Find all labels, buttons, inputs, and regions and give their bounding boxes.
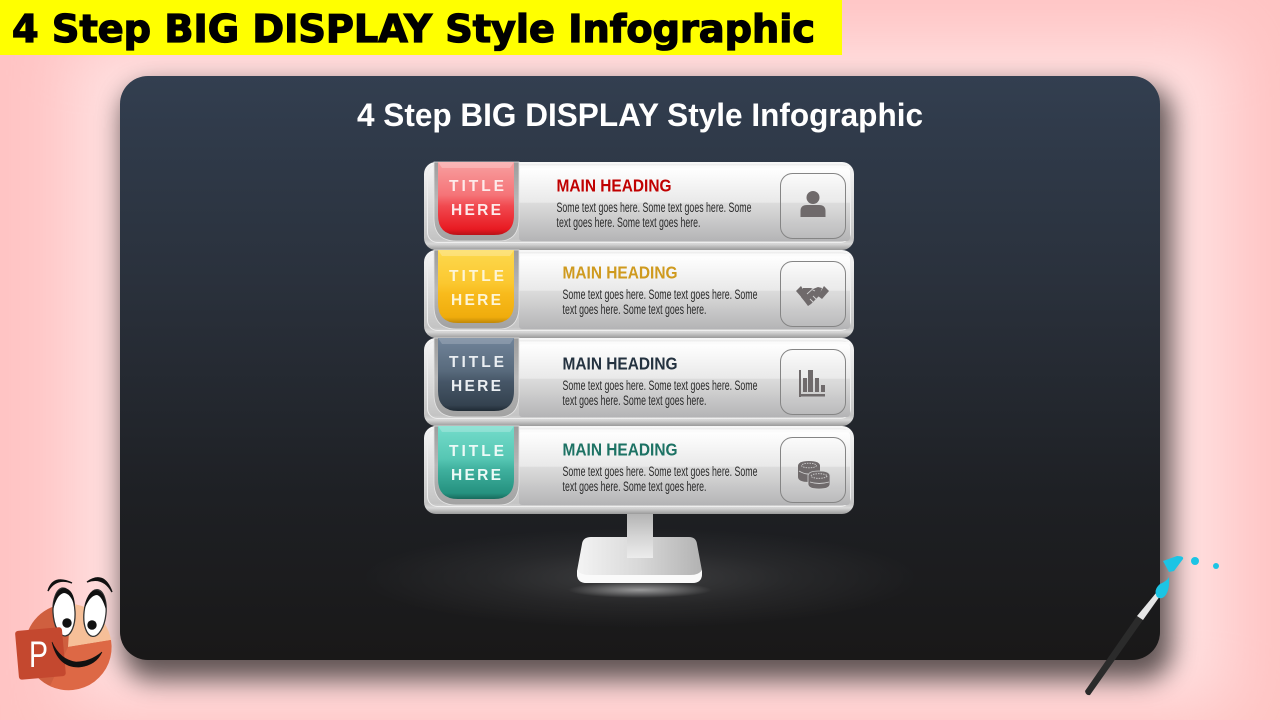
icon button: person — [780, 174, 846, 238]
stand neck — [627, 514, 653, 558]
tab 2 — [434, 250, 519, 329]
P tile: P — [29, 634, 48, 675]
paint drop large — [1191, 557, 1199, 565]
heading 3: MAIN HEADING — [562, 354, 678, 374]
icon button: bar chart — [780, 350, 846, 414]
eyebrows — [48, 578, 112, 592]
body text 1 — [556, 200, 752, 230]
paint splash — [1163, 556, 1183, 572]
body text 2: text goes here. Some text goes here. — [562, 302, 706, 317]
body text 4: text goes here. Some text goes here. — [562, 479, 706, 494]
tab 3 — [434, 338, 519, 417]
step 2 row — [424, 250, 854, 338]
heading 1: MAIN HEADING — [556, 176, 672, 196]
tab 1: TITLE — [449, 178, 504, 195]
top banner: 4 Step BIG DISPLAY Style Infographic — [12, 7, 815, 51]
tab 2: HERE — [451, 292, 501, 309]
stand base — [577, 537, 702, 583]
monitor stand — [568, 514, 712, 598]
PowerPoint mascot — [15, 578, 112, 690]
tab 4: HERE — [451, 467, 501, 484]
body text 4 — [562, 464, 758, 494]
tab 1 — [434, 162, 519, 241]
tab 3: TITLE — [449, 354, 504, 371]
tab 2: TITLE — [449, 268, 504, 285]
step 1 row — [424, 162, 854, 250]
brush ferrule — [1137, 593, 1160, 620]
panel shadow — [122, 86, 1172, 680]
brush handle — [1085, 616, 1143, 695]
eyes — [52, 587, 108, 638]
body text 3 — [562, 378, 758, 408]
tab 3: HERE — [451, 378, 501, 395]
heading 2: MAIN HEADING — [562, 262, 678, 282]
paint brush — [1085, 556, 1219, 695]
brush tip — [1156, 577, 1169, 598]
title: 4 Step BIG DISPLAY Style Infographic — [357, 97, 923, 133]
body text 3: Some text goes here. Some text goes here. Some — [562, 378, 758, 393]
smile — [52, 642, 102, 667]
body text 1: Some text goes here. Some text goes here. Some — [556, 200, 752, 215]
tab 4 — [434, 426, 519, 505]
dark display panel — [120, 76, 1160, 660]
pie body — [25, 604, 112, 690]
tab 4: TITLE — [449, 443, 504, 460]
body text 1: text goes here. Some text goes here. — [556, 215, 700, 230]
icon button: handshake — [780, 262, 846, 326]
body text 2: Some text goes here. Some text goes here. Some — [562, 287, 758, 302]
heading 4: MAIN HEADING — [562, 440, 678, 460]
paint drop small — [1213, 563, 1219, 569]
icon button: coins — [780, 438, 846, 502]
body text 2 — [562, 287, 758, 317]
body text 3: text goes here. Some text goes here. — [562, 393, 706, 408]
tab 1: HERE — [451, 202, 501, 219]
stand base reflection — [568, 582, 712, 598]
body text 4: Some text goes here. Some text goes here. Some — [562, 464, 758, 479]
step 4 row — [424, 426, 854, 514]
step 3 row — [424, 338, 854, 426]
